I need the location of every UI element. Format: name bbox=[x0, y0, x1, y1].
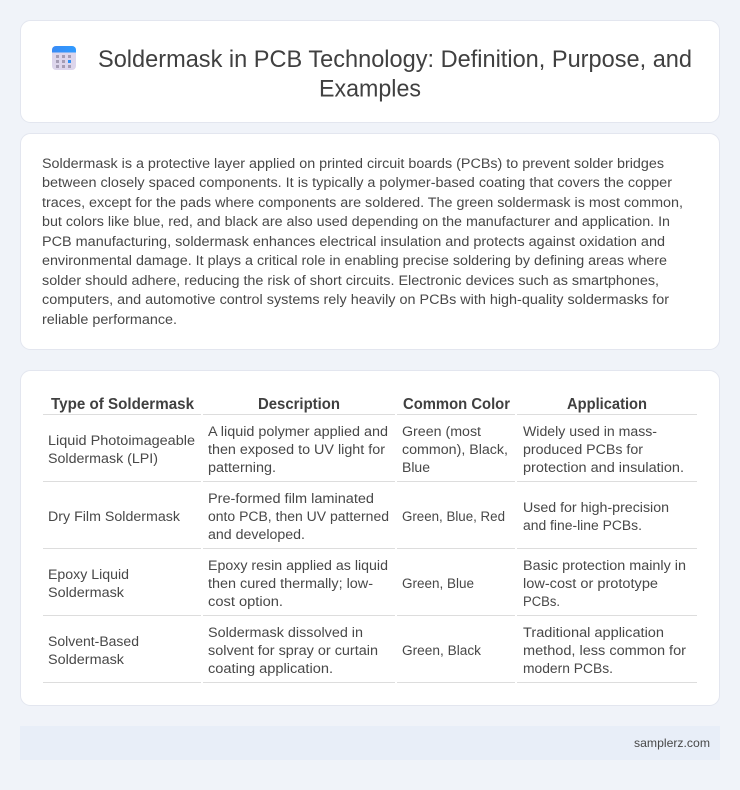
table row: dry film: onto PCB, then UV patterned bbox=[208, 509, 389, 525]
table row: epoxy liquid: then cured thermally; low- bbox=[208, 576, 373, 592]
table row: dry film: Dry Film Soldermask bbox=[48, 509, 181, 525]
text block: definition paragraph: traces, except for the pads where components are soldered. The green soldermask is most common, bbox=[42, 195, 683, 211]
table row: LPI: protection and insulation. bbox=[523, 460, 684, 476]
table row: solvent-based: modern PCBs. bbox=[523, 661, 613, 677]
table header: Common Color bbox=[403, 396, 510, 413]
table row: LPI: Liquid Photoimageable bbox=[48, 433, 195, 449]
table row: epoxy liquid: Green, Blue bbox=[402, 576, 474, 592]
table row: epoxy liquid: Epoxy Liquid bbox=[48, 567, 129, 583]
footer bar: samplerz.com bbox=[634, 736, 710, 750]
table row: LPI: produced PCBs for bbox=[523, 442, 643, 458]
table row: solvent-based: method, less common for bbox=[523, 643, 686, 659]
table row: epoxy liquid bbox=[48, 558, 686, 610]
table row: epoxy liquid: low-cost or prototype bbox=[523, 576, 658, 592]
table row: solvent-based: Soldermask bbox=[48, 652, 125, 668]
table row: dry film: and fine-line PCBs. bbox=[523, 518, 642, 534]
table row: solvent-based: Soldermask dissolved in bbox=[208, 625, 363, 641]
table row: dry film: Used for high-precision bbox=[523, 500, 669, 516]
table row: solvent-based: Solvent-Based bbox=[48, 634, 139, 650]
text block: definition paragraph: reliable performance. bbox=[42, 312, 177, 328]
panel: description bbox=[20, 134, 720, 350]
table row: solvent-based: Green, Black bbox=[402, 643, 482, 659]
table header: Application bbox=[567, 396, 647, 413]
table row: LPI: Green (most bbox=[402, 424, 481, 440]
text block: definition paragraph: solder should adhere, reducing the risk of short circuits. Electronic devices such as smartphones, bbox=[42, 273, 659, 289]
table row: LPI: Widely used in mass- bbox=[523, 424, 657, 440]
text block: definition paragraph: PCB manufacturing, soldermask enhances electrical insulation and protects against oxidation and bbox=[42, 234, 665, 250]
table row: epoxy liquid: Basic protection mainly in bbox=[523, 558, 686, 574]
icon: calendar grid bbox=[52, 46, 76, 70]
table row: dry film bbox=[48, 491, 669, 543]
text block: definition paragraph: computers, and automotive control systems rely heavily on PCBs with high-quality soldermasks for bbox=[42, 292, 669, 308]
table row: LPI: Soldermask (LPI) bbox=[48, 451, 158, 467]
title: Examples bbox=[319, 76, 421, 102]
text block: definition paragraph: between closely spaced components. It is typically a polymer-based coating that covers the copper bbox=[42, 175, 672, 191]
table header: Description bbox=[258, 396, 340, 413]
table row: solvent-based: Traditional application bbox=[523, 625, 664, 641]
text block: definition paragraph: but colors like blue, red, and black are also used depending on the manufacturer and application. In bbox=[42, 214, 670, 230]
panel: soldermask table bbox=[20, 370, 720, 706]
text block: definition paragraph: Soldermask is a protective layer applied on printed circuit boards (PCBs) to prevent solder bridges bbox=[42, 156, 664, 172]
text block: definition paragraph: environmental damage. It plays a critical role in enabling precise soldering by defining areas where bbox=[42, 253, 667, 269]
table row: epoxy liquid: Epoxy resin applied as liquid bbox=[208, 558, 388, 574]
table row: epoxy liquid: PCBs. bbox=[523, 594, 560, 610]
table row: solvent-based: coating application. bbox=[208, 661, 333, 677]
table row: solvent-based bbox=[48, 625, 686, 677]
table row: solvent-based: solvent for spray or curtain bbox=[208, 643, 378, 659]
table row: LPI: then exposed to UV light for bbox=[208, 442, 385, 458]
table row: LPI bbox=[48, 424, 684, 476]
table header: Type of Soldermask bbox=[51, 396, 194, 413]
table row: epoxy liquid: Soldermask bbox=[48, 585, 125, 601]
table row: dry film: Green, Blue, Red bbox=[402, 509, 505, 525]
table row: LPI: A liquid polymer applied and bbox=[208, 424, 388, 440]
footer bar bbox=[20, 726, 720, 760]
title: Soldermask in PCB Technology: Definition, Purpose, and bbox=[98, 46, 692, 73]
title bbox=[98, 46, 692, 102]
table row: LPI: patterning. bbox=[208, 460, 276, 476]
panel: title card bbox=[20, 20, 720, 122]
table row: LPI: Blue bbox=[402, 460, 430, 476]
table row: epoxy liquid: cost option. bbox=[208, 594, 283, 610]
text block: definition paragraph bbox=[42, 156, 683, 328]
table header bbox=[51, 396, 647, 413]
table row: dry film: and developed. bbox=[208, 527, 305, 543]
table row: LPI: common), Black, bbox=[402, 442, 508, 458]
table row: dry film: Pre-formed film laminated bbox=[208, 491, 374, 507]
